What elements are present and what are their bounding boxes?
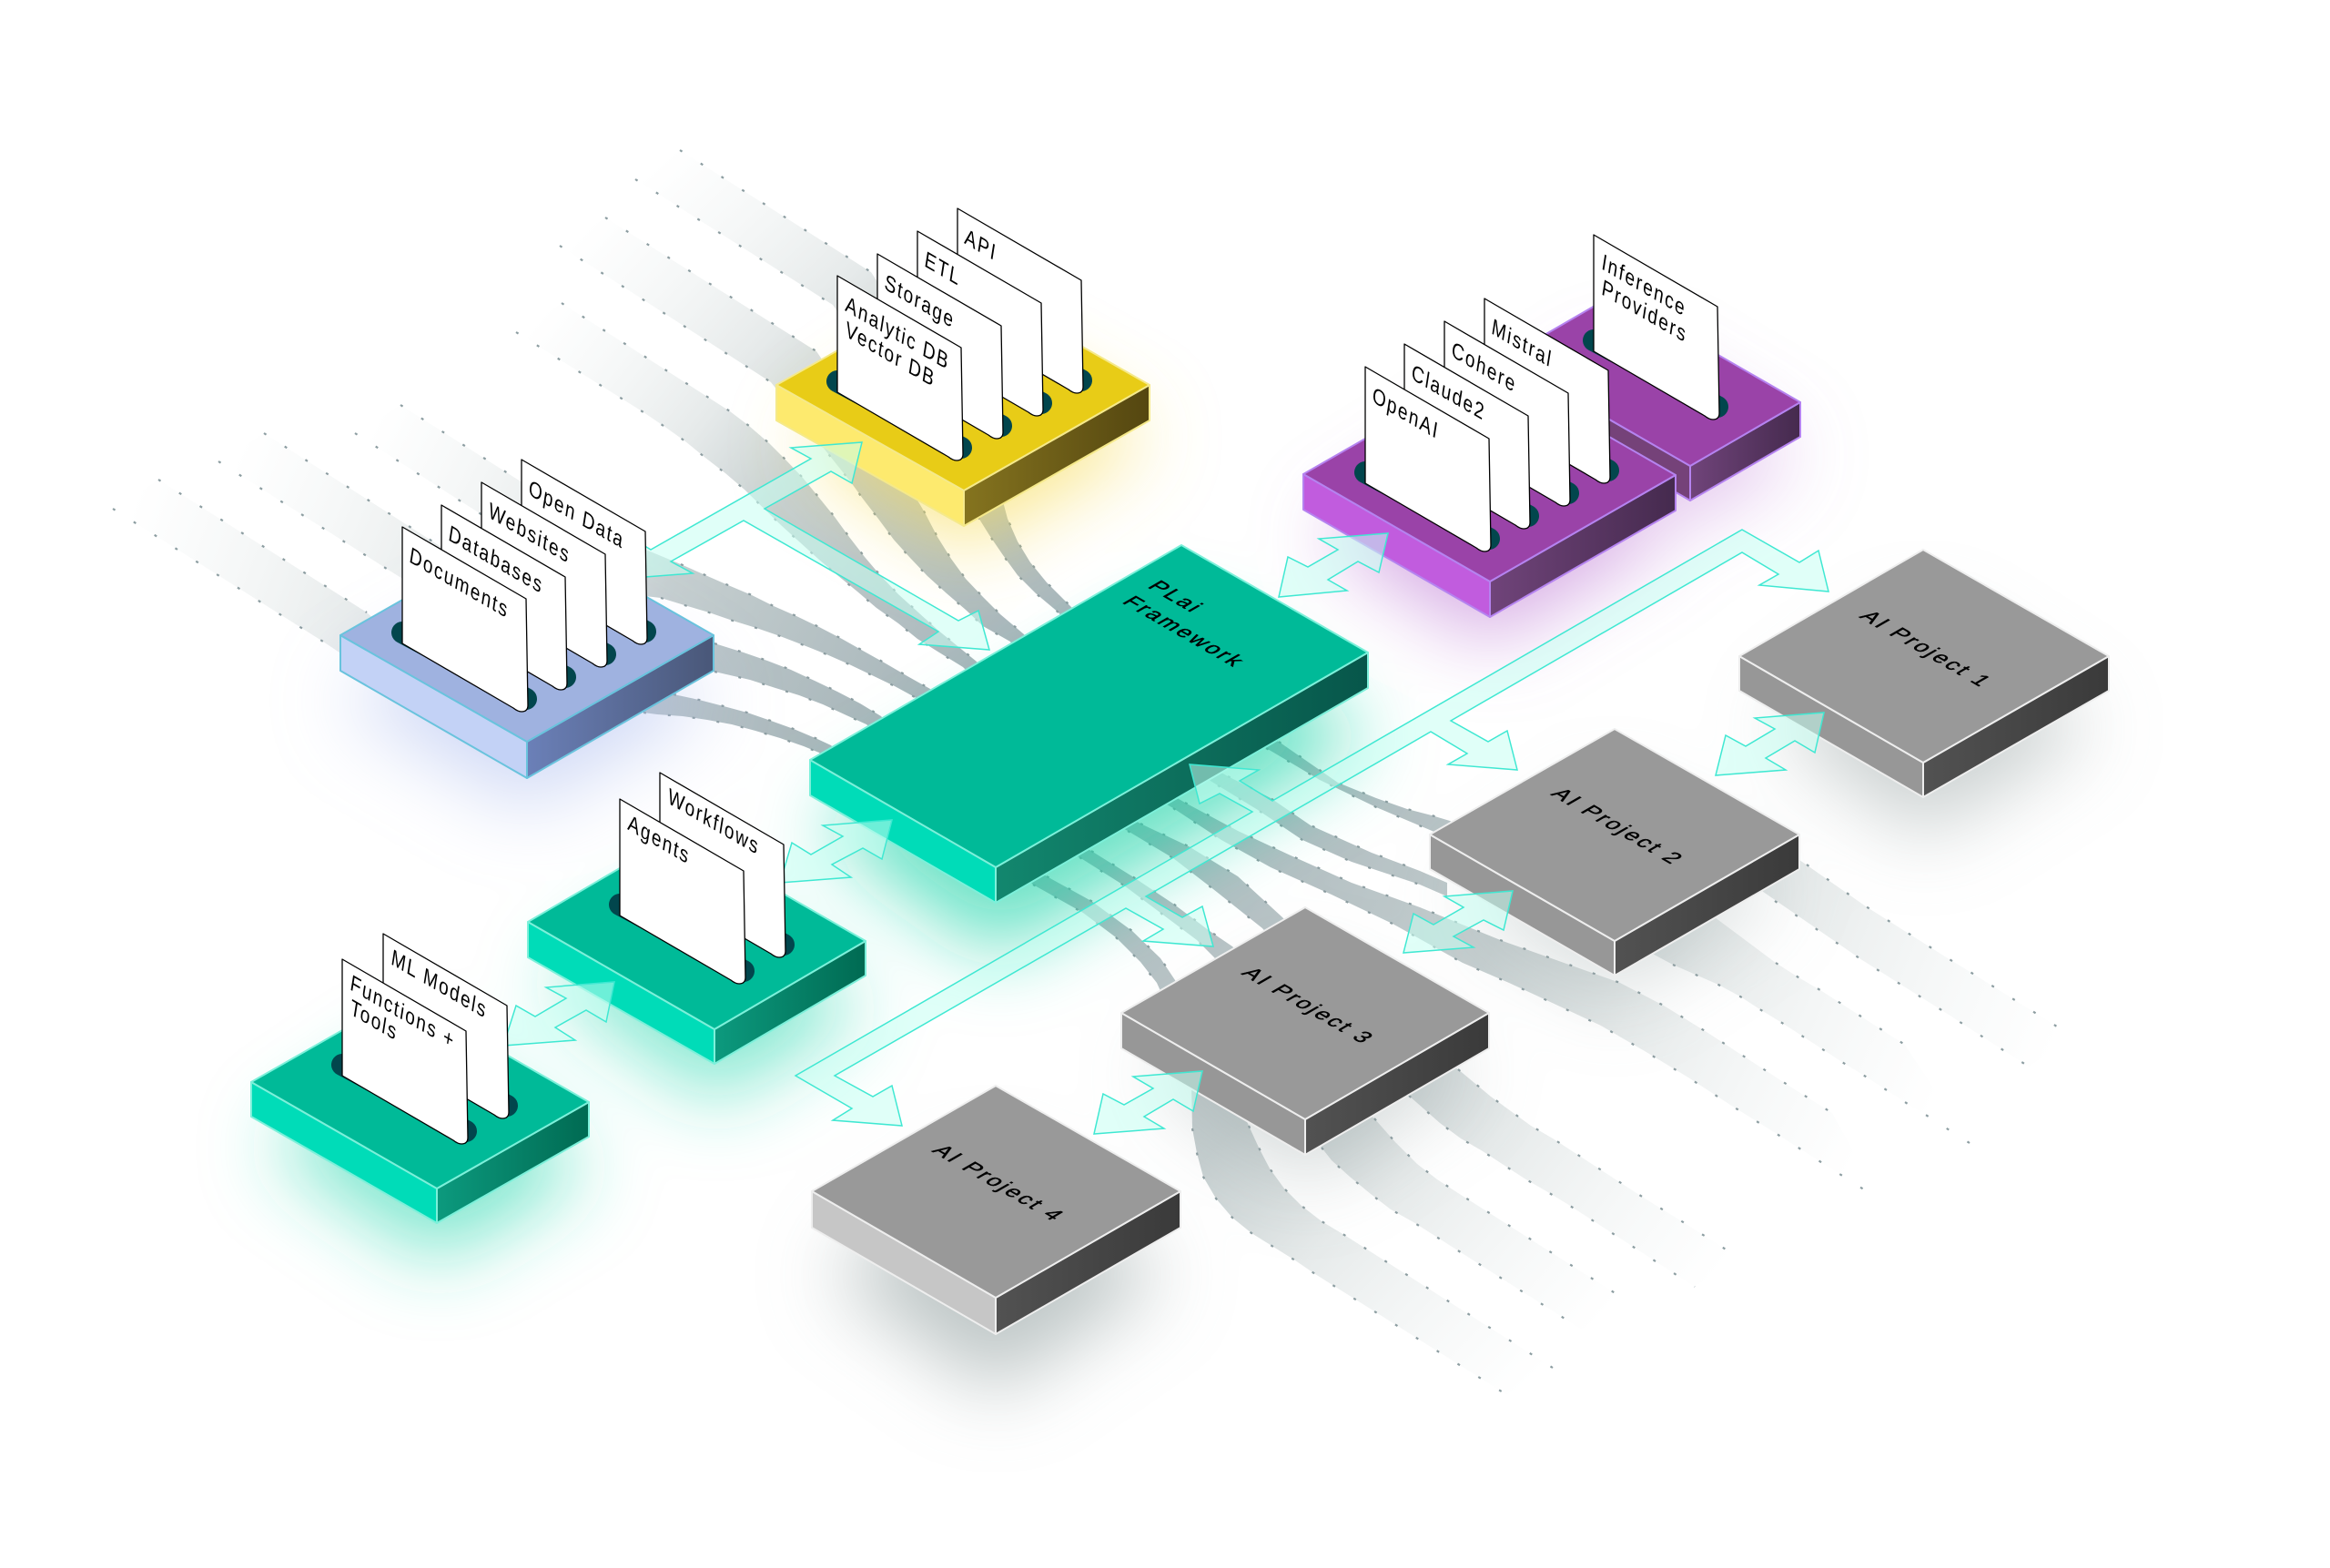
flow band: PLai to AI Project 2 top	[1256, 735, 1465, 837]
card: Agents	[620, 799, 745, 984]
block: agents base	[528, 834, 866, 1064]
card: Storage: Storage	[883, 268, 957, 333]
flow band: beyond AI Project 3 first	[1191, 1083, 1553, 1395]
card: Databases	[441, 505, 567, 690]
flow band: PLai to AI Project 3 second	[1065, 842, 1242, 969]
block: data infrastructure base	[776, 279, 1150, 526]
card: Workflows	[660, 773, 785, 957]
card: Analytic DB and Vector DB: Analytic DB	[844, 290, 951, 375]
block: AI Project 2	[1430, 729, 1799, 976]
card: OpenAI: OpenAI	[1371, 381, 1441, 444]
card: Claude2: Claude2	[1410, 359, 1487, 426]
card: ETL	[917, 231, 1043, 416]
arrow: functions to agents	[503, 982, 614, 1046]
flow band: behind yellow block into PLai	[635, 150, 1083, 628]
flow band: under yellow block into PLai	[560, 217, 1033, 655]
block: AI Project 2: AI Project 2	[1545, 784, 1690, 868]
arrow: AI Project 3 link	[1094, 1071, 1202, 1134]
flow band: PLai to AI Project 3 third	[1115, 814, 1292, 942]
card: Open Data	[522, 460, 647, 644]
block: functions base	[251, 996, 589, 1223]
block: PLai Framework	[810, 545, 1368, 903]
card: OpenAI	[1365, 367, 1491, 551]
card: Claude2	[1404, 344, 1530, 529]
card: Analytic DB and Vector DB: Vector DB	[844, 316, 937, 392]
card: Mistral	[1484, 298, 1610, 483]
block: AI Project 1	[1739, 550, 2109, 797]
flow band: blue block to PLai middle	[701, 637, 892, 735]
card: Workflows: Workflows	[666, 783, 761, 860]
card: ML Models: ML Models	[390, 944, 489, 1024]
card: ETL: ETL	[923, 246, 962, 291]
label: PLai Framework: Framework	[1117, 592, 1251, 671]
card: Documents	[402, 527, 528, 712]
arrow: PLai to LLM models	[1279, 533, 1388, 597]
block: AI Project 4	[812, 1086, 1180, 1334]
block: AI Project 3	[1121, 907, 1489, 1155]
arrow: distribution tree from PLai to AI projects	[795, 530, 1829, 1126]
card: ML Models	[383, 934, 509, 1118]
arrow: AI Project 1 link	[1716, 713, 1824, 775]
glow shadows beneath blocks	[269, 337, 2093, 1392]
card: Storage	[877, 254, 1003, 439]
card: Websites	[481, 482, 607, 667]
card: Cohere: Cohere	[1450, 336, 1518, 398]
card: Documents: Documents	[408, 541, 511, 623]
flow band: into Documents block	[113, 480, 428, 680]
card: Inference Providers	[1594, 235, 1719, 420]
flow band: PLai under AI Project 2 corner	[1160, 794, 1879, 1199]
card: API: API	[963, 223, 998, 266]
block: AI Project 3: AI Project 3	[1236, 964, 1381, 1047]
arrow: data sources to infrastructure and PLai	[622, 442, 989, 650]
card: Databases: Databases	[447, 520, 545, 599]
card: Mistral: Mistral	[1490, 313, 1555, 372]
flow band: PLai to AI Project 3 first	[1019, 865, 1183, 1001]
card: Open Data: Open Data	[527, 474, 626, 554]
flow band: beyond AI Project 2 first	[1647, 915, 1970, 1143]
label: PLai Framework: PLai	[1142, 577, 1210, 616]
flow band: beyond AI Project 2 second	[1757, 855, 2074, 1067]
card: Functions + Tools	[342, 959, 468, 1144]
card: API	[957, 208, 1083, 393]
flow band: into Websites card	[355, 405, 601, 550]
block: AI Project 4: AI Project 4	[927, 1141, 1071, 1225]
card: Websites: Websites	[487, 497, 572, 569]
flow band: into Databases card	[218, 433, 546, 614]
flow band: PLai to AI Project 2 left	[1206, 769, 1447, 896]
flow band: blue block to PLai upper	[637, 546, 942, 708]
card: Functions + Tools: Tools	[349, 994, 400, 1046]
flow band: blue block to PLai lower	[628, 687, 842, 764]
block: data sources base	[340, 529, 714, 778]
flow band: past yellow block into PLai	[516, 303, 988, 678]
card: Inference Providers: Inference	[1600, 248, 1688, 321]
card: Functions + Tools: Functions +	[349, 969, 457, 1054]
block: inference providers base	[1504, 295, 1800, 501]
block: AI Project 1: AI Project 1	[1854, 607, 1999, 691]
flow band: beyond AI Project 3 third	[1393, 1060, 1740, 1287]
card: Agents: Agents	[626, 809, 692, 869]
arrow: agents to PLai	[780, 820, 892, 883]
arrow: AI Project 2 link	[1403, 891, 1513, 953]
card: Analytic DB and Vector DB	[837, 276, 963, 460]
card: Inference Providers: Providers	[1600, 274, 1689, 348]
flow band: beyond AI Project 3 second	[1311, 1112, 1626, 1330]
block: LLM models base	[1303, 368, 1676, 617]
card: Cohere	[1444, 321, 1570, 506]
